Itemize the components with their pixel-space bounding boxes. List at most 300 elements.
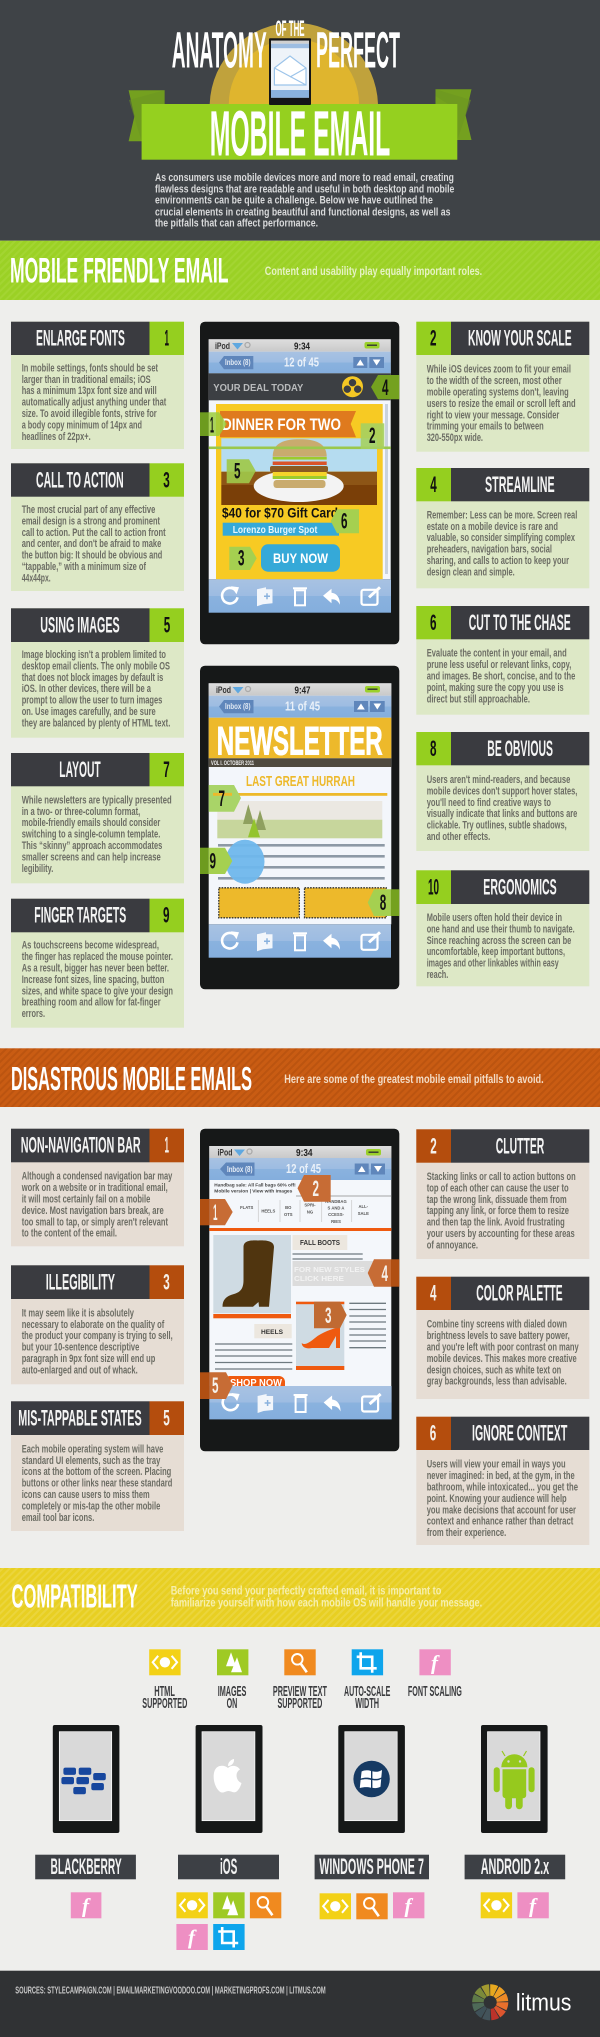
cramped navigation bar: S AND A [328, 1206, 344, 1210]
masthead: newsletter: NEWSLETTER [217, 719, 383, 763]
body text: As touchscreens become widespread, [22, 940, 159, 952]
body text: switching to a single-column template. [22, 829, 160, 841]
marker 3: 3 [325, 1303, 332, 1328]
marker 5 [227, 458, 256, 484]
body text: Increase font sizes, line spacing, button [22, 974, 164, 986]
low contrast button: CLICK HERE [294, 1274, 344, 1283]
body text: This “skinny” approach accommodates [22, 840, 162, 852]
cramped navigation bar: CCESS- [328, 1212, 345, 1217]
label: ios [178, 1854, 279, 1879]
body text: “tappable,” with a minimum size of [22, 561, 146, 573]
status bar: iPod [218, 1147, 232, 1157]
panel: clutter [416, 1129, 589, 1259]
body text [22, 1307, 173, 1376]
body copy lines [218, 844, 385, 880]
cramped navigation bar: SALE [358, 1211, 369, 1216]
number badge: 5 [164, 612, 170, 637]
body text: breathing room and allow for fat-finger [22, 997, 161, 1009]
body text: icons can cause users to miss them [22, 1489, 150, 1501]
panel: ergonomics [416, 870, 589, 986]
support icons: blackberry: f [82, 1894, 91, 1918]
panel: layout [11, 753, 184, 883]
section heading: MOBILE FRIENDLY EMAIL [10, 251, 228, 290]
text: FONT SCALING [408, 1683, 462, 1700]
body text: and center, and don't be afraid to make [22, 538, 161, 550]
body text: a body copy minimum of 14px and [22, 419, 142, 431]
marker 1: 1 [210, 412, 214, 438]
marker 6 [331, 508, 359, 534]
panel: layout: LAYOUT [59, 757, 101, 782]
dateline bar [209, 758, 391, 767]
hero image: burger on a plate [221, 438, 377, 505]
panel: streamline [416, 468, 589, 588]
header: OF THE [276, 16, 305, 41]
number badge [416, 1417, 451, 1450]
number badge [150, 322, 184, 355]
status bar [209, 339, 391, 352]
marker 5: 5 [212, 1373, 218, 1398]
litmus logo wheel [473, 1985, 507, 2019]
cramped navigation bar: HANDBAG [325, 1199, 347, 1204]
phone 3: cluttered shoe email [200, 1129, 399, 1451]
body text: legibility. [22, 863, 53, 875]
number badge [416, 468, 451, 501]
panel: cut to the chase [416, 606, 589, 715]
body text: Image blocking isn't a problem limited to [22, 649, 166, 661]
legend: images on [217, 1649, 248, 1712]
body text: larger than in traditional emails; iOS [22, 374, 151, 386]
number badge [150, 899, 184, 932]
section description: Before you send your perfectly crafted email, it is important to [171, 1585, 441, 1597]
newsletter image: trees [217, 801, 382, 838]
panel: using images [11, 608, 184, 738]
body text: direct but still approachable. [427, 693, 530, 705]
legend: font scaling: f [431, 1650, 440, 1674]
status bar [209, 1146, 391, 1159]
copy lines beside heel [349, 1303, 386, 1348]
number badge: 8 [430, 736, 436, 761]
body text: standard UI elements, such as the tray [22, 1455, 161, 1467]
cramped navigation bar: FLATS [240, 1205, 253, 1210]
panel: illegibility: ILLEGIBILITY [46, 1269, 115, 1294]
low contrast button [292, 1261, 374, 1286]
intro text: environments can be quite a challenge. Below we have outlined the [155, 195, 433, 207]
body text: too small to tap, or simply aren't relevant [22, 1216, 168, 1228]
section description: familiarize yourself with how each mobile OS will handle your message. [171, 1597, 482, 1609]
header: ANATOMY [172, 22, 267, 79]
body text: Each mobile operating system will have [22, 1443, 163, 1455]
panel: enlarge fonts: ENLARGE FONTS [36, 326, 125, 351]
body text [427, 1171, 576, 1251]
body text: of annoyance. [427, 1239, 478, 1251]
cramped navigation bar: HEELS [261, 1208, 275, 1214]
toolbar [209, 1386, 392, 1419]
text: SUPPORTED [142, 1695, 187, 1712]
body text [427, 1459, 578, 1539]
number badge [416, 732, 451, 765]
marker 4 [368, 1259, 399, 1287]
body text: necessary to elaborate on the quality of [22, 1319, 165, 1331]
nav bar: Inbox (8) [225, 358, 251, 367]
number badge [150, 463, 184, 497]
preheader copy [214, 1183, 391, 1196]
marker 5 [200, 1372, 233, 1399]
body text: iOS. In other devices, there will be a [22, 683, 152, 695]
header [0, 0, 600, 241]
intro text: crucial elements in creating beautiful and functional designs, as well as [155, 206, 450, 218]
number badge: 4 [430, 472, 437, 497]
panel: using images: USING IMAGES [40, 612, 120, 637]
section band: mobile friendly email [0, 241, 600, 300]
number badge: 10 [428, 874, 439, 899]
marker 3 [314, 1302, 347, 1328]
cramped navigation bar: NG [307, 1210, 313, 1214]
body text: automatically adjust anything under that [22, 397, 167, 409]
body text: mobile-friendly emails should consider [22, 817, 161, 829]
body text: Although a condensed navigation bar may [22, 1171, 173, 1183]
body text: headlines of 22px+. [22, 431, 91, 443]
body text: trimming your emails to between [427, 421, 544, 433]
label: android [465, 1854, 565, 1879]
header: PERFECT [316, 22, 400, 79]
number badge: 9 [163, 903, 170, 928]
offer price: $40 for $70 Gift Card [222, 506, 338, 520]
support icons: ios: f [188, 1925, 197, 1949]
body text: In mobile settings, fonts should be set [22, 362, 158, 374]
ribbon tails [129, 89, 472, 141]
nav bar [209, 1158, 391, 1180]
panel: call to action: CALL TO ACTION [36, 467, 124, 492]
section band: disastrous mobile emails [0, 1048, 600, 1107]
number badge [416, 1277, 451, 1310]
panel: illegibility [11, 1265, 184, 1384]
body text: completely or mis-tap the other mobile [22, 1500, 160, 1512]
number badge: 3 [163, 1269, 170, 1294]
number badge: 1 [164, 1133, 169, 1158]
dotted button right [304, 888, 386, 918]
copy lines under heels [215, 1344, 292, 1369]
body text: sizes, and white space to give your design [22, 985, 173, 997]
panel: mis-tappable states [11, 1401, 184, 1531]
body text: the finger has replaced the mouse pointer. [22, 951, 173, 963]
cramped navigation bar [209, 1199, 391, 1231]
marker 9: 9 [210, 848, 216, 874]
body text: in a two- or three-column format, [22, 806, 140, 818]
body text [22, 1443, 172, 1524]
body text [21, 1171, 173, 1240]
body text: size. To avoid illegible fonts, strive for [22, 408, 157, 420]
marker 4 [371, 375, 399, 400]
body text: As a result, bigger has never been better. [22, 962, 169, 974]
device: windows phone [338, 1725, 405, 1833]
body text: but your 10-sentence descriptive [22, 1342, 139, 1354]
support icons: blackberry [71, 1892, 101, 1918]
panel: be obvious [416, 732, 589, 851]
legend: html supported: HTML [154, 1683, 175, 1700]
number badge: 7 [163, 757, 170, 782]
marker 3: 3 [238, 546, 244, 570]
status bar [209, 683, 391, 696]
orange ribbon: dinner for two [220, 411, 356, 437]
support icons: android [481, 1892, 549, 1918]
number badge: 6 [430, 1421, 436, 1446]
body text [427, 1319, 579, 1388]
body text: prompt to allow the user to turn images [22, 695, 162, 707]
status bar: iPod [215, 341, 230, 351]
panel: finger targets: FINGER TARGETS [34, 903, 126, 928]
body text [22, 504, 166, 584]
marker 3 [229, 546, 257, 570]
cramped navigation bar: RIES [331, 1219, 341, 1224]
body text: from their experience. [427, 1527, 506, 1539]
body text: email design is a strong and prominent [22, 515, 160, 527]
legend: preview text supported: SUPPORTED [278, 1695, 322, 1712]
marker 2: 2 [312, 1176, 319, 1201]
number badge [416, 870, 451, 904]
icon: android logo [494, 1751, 535, 1809]
marker 1: 1 [213, 1200, 218, 1225]
heel product image [296, 1302, 344, 1370]
finger target blob [226, 840, 264, 884]
panel: non-navigation bar [11, 1129, 184, 1246]
body text: errors. [22, 1008, 45, 1020]
panel: non-navigation bar: NON-NAVIGATION BAR [21, 1133, 141, 1158]
body text: has a minimum 13px font size and will [22, 385, 157, 397]
preheader bar: YOUR DEAL TODAY [213, 382, 303, 394]
number badge: 2 [430, 1133, 437, 1158]
number badge: 3 [163, 467, 170, 492]
legend: auto-scale width [344, 1649, 390, 1712]
heels tag: HEELS [261, 1329, 284, 1336]
body text [22, 794, 172, 875]
label: windows phone 7: WINDOWS PHONE 7 [319, 1854, 424, 1879]
text: AUTO-SCALE [344, 1683, 390, 1700]
label: windows phone 7 [315, 1854, 429, 1879]
number badge: 1 [164, 326, 169, 351]
sources: SOURCES: STYLECAMPAIGN.COM | EMAILMARKETINGVOODOO.COM | MARKETINGPROFS.COM | LITMUS.COM [15, 1986, 326, 1996]
toolbar [209, 924, 391, 958]
litmus wordmark: litmus [516, 1990, 571, 2017]
section heading: COMPATIBILITY [12, 1578, 138, 1615]
number badge: 2 [430, 326, 436, 351]
body text: reach. [427, 969, 448, 981]
body text: It may seem like it is absolutely [22, 1307, 135, 1319]
legend: images on: IMAGES [218, 1683, 246, 1700]
status bar: iPod [216, 685, 231, 695]
shop now button: SHOP NOW [230, 1378, 283, 1389]
preheader copy: Handbag sale: All Fall bags 60% off! [214, 1183, 296, 1188]
sun circle behind phone [210, 23, 378, 104]
cramped navigation bar: SPRI- [304, 1202, 316, 1208]
ribbon [142, 104, 457, 160]
body text [427, 509, 577, 578]
body text [427, 364, 576, 444]
body text [427, 774, 577, 843]
marker 2 [298, 1175, 331, 1202]
legend: images on: ON [227, 1695, 237, 1712]
legend: preview text supported [273, 1649, 327, 1712]
text: PREVIEW TEXT [273, 1683, 327, 1700]
boot product image [213, 1235, 291, 1318]
preheader copy: Mobile version | View with images [214, 1188, 293, 1193]
legend: auto-scale width: WIDTH [355, 1695, 379, 1712]
body text: While newsletters are typically presented [22, 794, 172, 806]
panel: finger targets [11, 899, 184, 1028]
body text: and other effects. [427, 831, 490, 843]
device: blackberry [53, 1725, 119, 1833]
blue ribbon: merchant: Lorenzo Burger Spot [233, 525, 318, 536]
body text: the button big: It should be obvious and [22, 550, 162, 562]
dotted button left [219, 888, 299, 918]
panel: know your scale [416, 322, 589, 452]
nav bar: 12 of 45 [286, 1161, 321, 1176]
marker 7: 7 [218, 786, 225, 811]
masthead: newsletter [209, 718, 391, 763]
body text: that does not block images by default is [22, 672, 163, 684]
heels tag [254, 1324, 292, 1338]
panel: color palette [416, 1277, 589, 1399]
footer [0, 1971, 600, 2037]
body text: device. Most navigation bars break, are [22, 1205, 164, 1217]
cramped navigation bar: OTS [284, 1212, 293, 1217]
body text: it will most certainly fail on a mobile [22, 1194, 150, 1206]
marker 5: 5 [234, 458, 240, 484]
phone 2: newsletter email [200, 666, 399, 989]
number badge [416, 322, 451, 355]
section band: compatibility [0, 1568, 600, 1627]
email card background [216, 404, 383, 579]
marker 8 [368, 889, 399, 916]
icon: windows logo [353, 1761, 390, 1797]
fall boots tag: FALL BOOTS [300, 1240, 340, 1247]
scroll bar [385, 404, 388, 574]
icon: phone with envelope [269, 38, 311, 105]
icon: blackberry logo [61, 1768, 106, 1794]
dateline bar: VOL I. OCTOBER 2011 [211, 760, 254, 767]
number badge: 4 [430, 1281, 437, 1306]
nav bar [209, 352, 391, 373]
body text: 44x44px. [22, 572, 51, 584]
newsletter headline: LAST GREAT HURRAH [246, 773, 355, 790]
section subtitle: Here are some of the greatest mobile email pitfalls to avoid. [284, 1074, 544, 1086]
section band: disastrous mobile emails: DISASTROUS MOBILE EMAILS [11, 1060, 252, 1097]
marker 7 [209, 785, 241, 812]
body text: on. Use images carefully, and be sure [22, 706, 156, 718]
toolbar [209, 579, 391, 613]
marker 1 [200, 412, 227, 438]
marker 6: 6 [341, 508, 348, 534]
number badge [416, 1129, 451, 1163]
marker 4: 4 [382, 375, 389, 400]
panel: ignore context [416, 1417, 589, 1545]
number badge [150, 1265, 184, 1299]
body text: smaller screens and can help increase [22, 851, 161, 863]
legend: html supported [142, 1649, 187, 1712]
body text [22, 362, 167, 443]
marker 8: 8 [380, 890, 386, 915]
intro text: flawless designs that are readable and useful in both desktop and mobile [155, 183, 454, 195]
support icons: windows phone: f [404, 1894, 414, 1918]
label: blackberry [35, 1854, 136, 1879]
cramped navigation bar: ALL- [359, 1204, 369, 1209]
body text [22, 649, 170, 729]
phone 1: deal email [200, 322, 399, 644]
icon: apple logo [214, 1759, 242, 1793]
body text: they are balanced by plenty of HTML text. [22, 717, 170, 729]
body text: to the content of the email. [22, 1228, 117, 1240]
support icons: windows phone [320, 1892, 424, 1919]
body text: buttons or other links near these standard [22, 1478, 172, 1490]
body text: the product your company is trying to sell, [22, 1330, 173, 1342]
number badge [150, 1401, 184, 1435]
marker 2: 2 [369, 423, 376, 448]
label: blackberry: BLACKBERRY [50, 1854, 122, 1879]
body text: email tool bar icons. [22, 1512, 94, 1524]
panel: mis-tappable states: MIS-TAPPABLE STATES [18, 1405, 142, 1430]
scale guide line [209, 446, 391, 449]
device: ios [196, 1725, 262, 1833]
marker 2 [361, 423, 384, 449]
body text: The most crucial part of any effective [22, 504, 155, 516]
nav bar [209, 696, 391, 718]
body text [22, 940, 173, 1020]
support icons: ios [176, 1892, 281, 1950]
button: buy now [261, 544, 340, 572]
body text: desktop email clients. The only mobile OS [22, 660, 170, 672]
body text: design clean and simple. [427, 566, 515, 578]
section description [171, 1585, 482, 1609]
number badge: 6 [430, 610, 436, 635]
marker 1 [200, 1199, 233, 1225]
panel: clutter: CLUTTER [496, 1133, 544, 1158]
body text: auto-enlarged and out of whack. [22, 1364, 138, 1376]
status bar: 9:34 [294, 341, 310, 352]
button: buy now: BUY NOW [273, 550, 329, 566]
number badge [150, 608, 184, 642]
nav bar: 12 of 45 [284, 354, 319, 370]
copy lines under fall boots [292, 1254, 363, 1259]
low contrast button: FOR NEW STYLES [294, 1265, 365, 1274]
body text [427, 648, 575, 705]
nav bar: Inbox (8) [227, 1165, 253, 1174]
number badge [150, 1129, 184, 1162]
body text: paragraph in 9px font size will end up [22, 1353, 155, 1365]
body text: work on a website or in traditional email, [21, 1182, 168, 1194]
label: ios: iOS [220, 1854, 237, 1879]
body text [427, 912, 575, 981]
support icons: android: f [529, 1894, 538, 1918]
cramped navigation bar: BO [285, 1205, 292, 1210]
number badge: 5 [163, 1405, 170, 1430]
body text: 320-550px wide. [427, 432, 483, 444]
marker 4: 4 [382, 1261, 388, 1286]
preheader bar [209, 373, 391, 400]
orange ribbon: dinner for two: DINNER FOR TWO [222, 415, 341, 434]
nav bar: 11 of 45 [285, 698, 320, 714]
intro text [155, 172, 454, 230]
status bar: 9:47 [294, 685, 311, 696]
fall boots tag [292, 1235, 347, 1250]
intro text: As consumers use mobile devices more and more to read email, creating [155, 172, 454, 184]
body text: icons at the bottom of the screen. Placing [22, 1466, 171, 1478]
device: android [481, 1725, 548, 1833]
intro text: the pitfalls that can affect performance. [155, 218, 318, 230]
number badge [150, 753, 184, 786]
status bar: 9:34 [296, 1148, 313, 1159]
marker 9 [200, 848, 232, 874]
number badge [416, 606, 451, 639]
panel: call to action [11, 463, 184, 591]
